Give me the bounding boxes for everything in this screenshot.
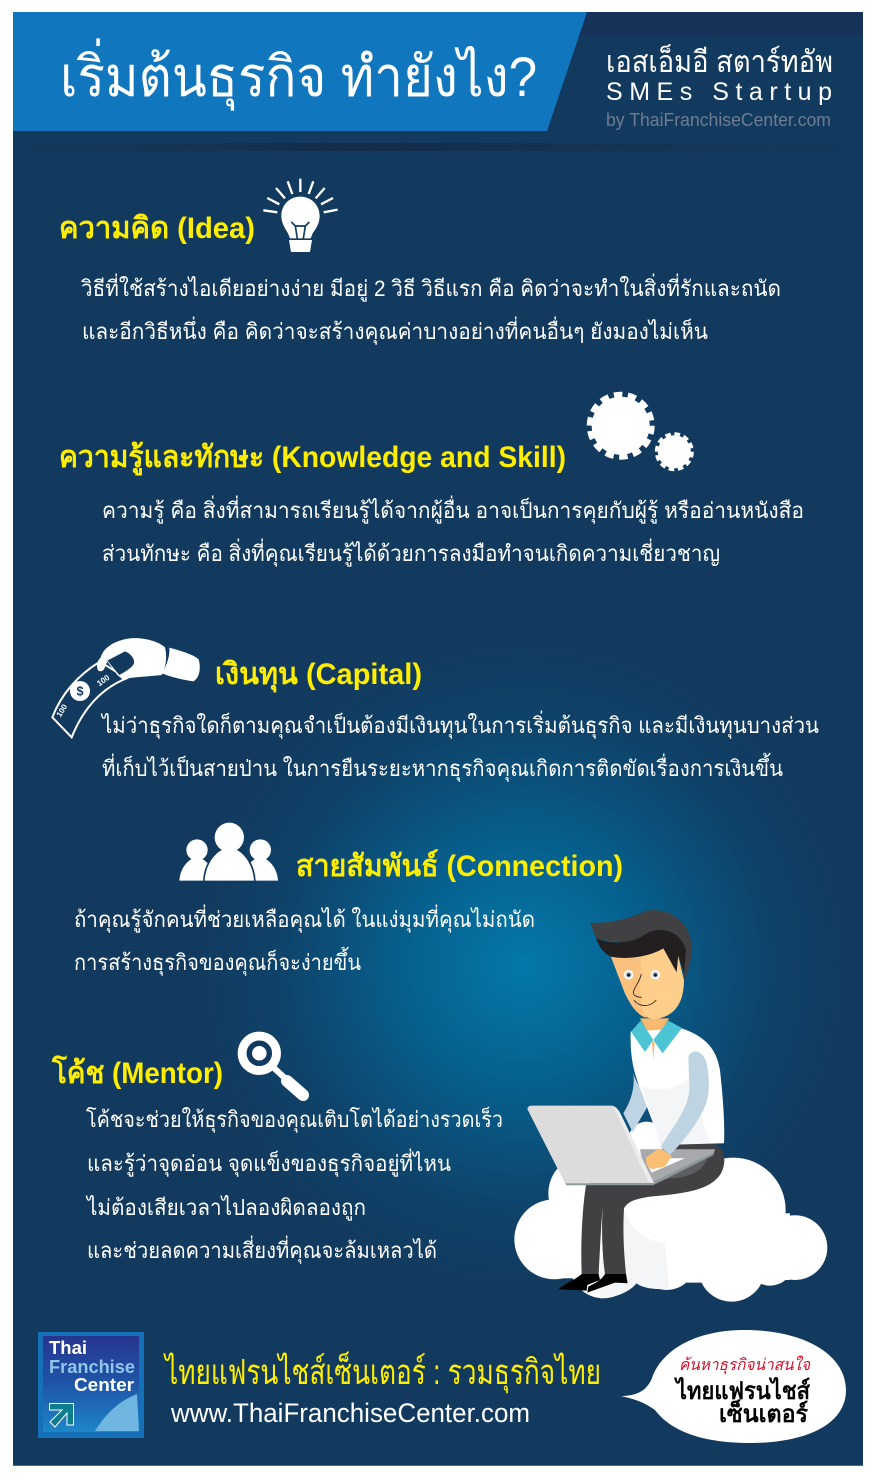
right arm xyxy=(661,1052,709,1155)
cloud xyxy=(514,1122,827,1302)
trousers xyxy=(581,1143,724,1274)
logo: Franchise xyxy=(49,1357,135,1377)
neck xyxy=(640,1018,669,1043)
illustration: man with laptop on cloud xyxy=(514,910,827,1302)
trouser shadow xyxy=(657,1158,707,1183)
heading: connection: สายสัมพันธ์ (Connection) xyxy=(296,849,623,883)
text: mentor line 2: และรู้ว่าจุดอ่อน จุดแข็งของธุรกิจอยู่ที่ไหน xyxy=(87,1148,451,1177)
subtitle thai: เอสเอ็มอี สตาร์ทอัพ xyxy=(606,43,833,79)
subtitle english: SMEs Startup xyxy=(606,78,832,106)
shoes xyxy=(558,1274,600,1291)
heading: idea: ความคิด (Idea) xyxy=(59,212,255,245)
footer xyxy=(38,1330,846,1443)
footer heading: ไทยแฟรนไชส์เซ็นเตอร์ : รวมธุรกิจไทย xyxy=(163,1351,601,1393)
logo xyxy=(38,1332,144,1438)
icon: hand with money: 100 xyxy=(95,673,112,688)
speech bubble: ค้นหาธุรกิจน่าสนใจ xyxy=(679,1355,811,1375)
section: connection xyxy=(74,823,623,976)
text: idea line 1: วิธีที่ใช้สร้างไอเดียอย่างง่าย มีอยู่ 2 วิธี วิธีแรก คือ คิดว่าจะทำในสิ่งที่รักและถนัด xyxy=(80,273,781,302)
speech bubble xyxy=(621,1330,846,1443)
footer url: www.ThaiFranchiseCenter.com xyxy=(170,1398,530,1428)
speech bubble: ไทยแฟรนไชส์ xyxy=(673,1376,810,1405)
speech bubble: เซ็นเตอร์ xyxy=(719,1399,808,1428)
section: mentor xyxy=(51,1032,503,1264)
text: idea line 2: และอีกวิธีหนึ่ง คือ คิดว่าจะสร้างคุณค่าบางอย่างที่คนอื่นๆ ยังมองไม่เห็น xyxy=(82,316,708,345)
section: capital xyxy=(52,638,819,782)
header banner xyxy=(13,12,863,131)
hair xyxy=(590,910,692,980)
icon: hand with money xyxy=(52,638,200,737)
icon: logo arrow xyxy=(50,1404,74,1427)
laptop screen xyxy=(527,1106,654,1183)
text: capital line 1: ไม่ว่าธุรกิจใดก็ตามคุณจำเป็นต้องมีเงินทุนในการเริ่มต้นธุรกิจ และมีเงินทุนบางส่วน xyxy=(100,710,819,739)
icon: gears xyxy=(590,395,692,469)
text: knowledge line 2: ส่วนทักษะ คือ สิ่งที่คุณเรียนรู้ได้ด้วยการลงมือทำจนเกิดความเชี่ยวชาญ xyxy=(102,538,720,567)
laptop base xyxy=(640,1149,715,1185)
byline: by ThaiFranchiseCenter.com xyxy=(606,110,831,130)
text: mentor line 3: ไม่ต้องเสียเวลาไปลองผิดลองถูก xyxy=(85,1195,366,1221)
hand xyxy=(646,1148,672,1169)
text: connection line 1: ถ้าคุณรู้จักคนที่ช่วยเหลือคุณได้ ในแง่มุมที่คุณไม่ถนัด xyxy=(74,904,535,933)
icon: light bulb xyxy=(263,179,338,252)
title: เริ่มต้นธุรกิจ ทำยังไง? xyxy=(60,38,537,111)
left arm xyxy=(623,1073,649,1132)
face xyxy=(611,948,684,1019)
nose and mouth xyxy=(633,974,656,1006)
heading: mentor: โค้ช (Mentor) xyxy=(51,1054,223,1090)
collar xyxy=(631,1021,682,1053)
text: capital line 2: ที่เก็บไว้เป็นสายป่าน ในการยืนระยะหากธุรกิจคุณเกิดการติดขัดเรื่องการเงินขึ้น xyxy=(102,753,783,782)
logo: Center xyxy=(74,1375,134,1395)
icon: people xyxy=(179,823,278,881)
icon: hand with money: 100 xyxy=(55,702,70,719)
shirt xyxy=(631,1028,724,1145)
text: knowledge line 1: ความรู้ คือ สิ่งที่สามารถเรียนรู้ได้จากผู้อื่น อาจเป็นการคุยกับผู้รู้ หรืออ่านหนังสือ xyxy=(102,495,804,524)
section: idea xyxy=(59,179,781,345)
text: connection line 2: การสร้างธุรกิจของคุณก็จะง่ายขึ้น xyxy=(74,947,361,976)
text: mentor line 4: และช่วยลดความเสี่ยงที่คุณจะล้มเหลวได้ xyxy=(87,1235,437,1264)
section: knowledge and skill xyxy=(59,395,804,567)
text: mentor line 1: โค้ชจะช่วยให้ธุรกิจของคุณเติบโตได้อย่างรวดเร็ว xyxy=(86,1105,503,1133)
icon: magnifier xyxy=(238,1032,303,1095)
heading: capital: เงินทุน (Capital) xyxy=(215,658,422,693)
logo: Thai xyxy=(49,1338,87,1358)
eyes xyxy=(624,970,660,979)
heading: knowledge: ความรู้และทักษะ (Knowledge and Skill) xyxy=(59,441,566,476)
icon: hand with money: $ xyxy=(76,685,84,699)
